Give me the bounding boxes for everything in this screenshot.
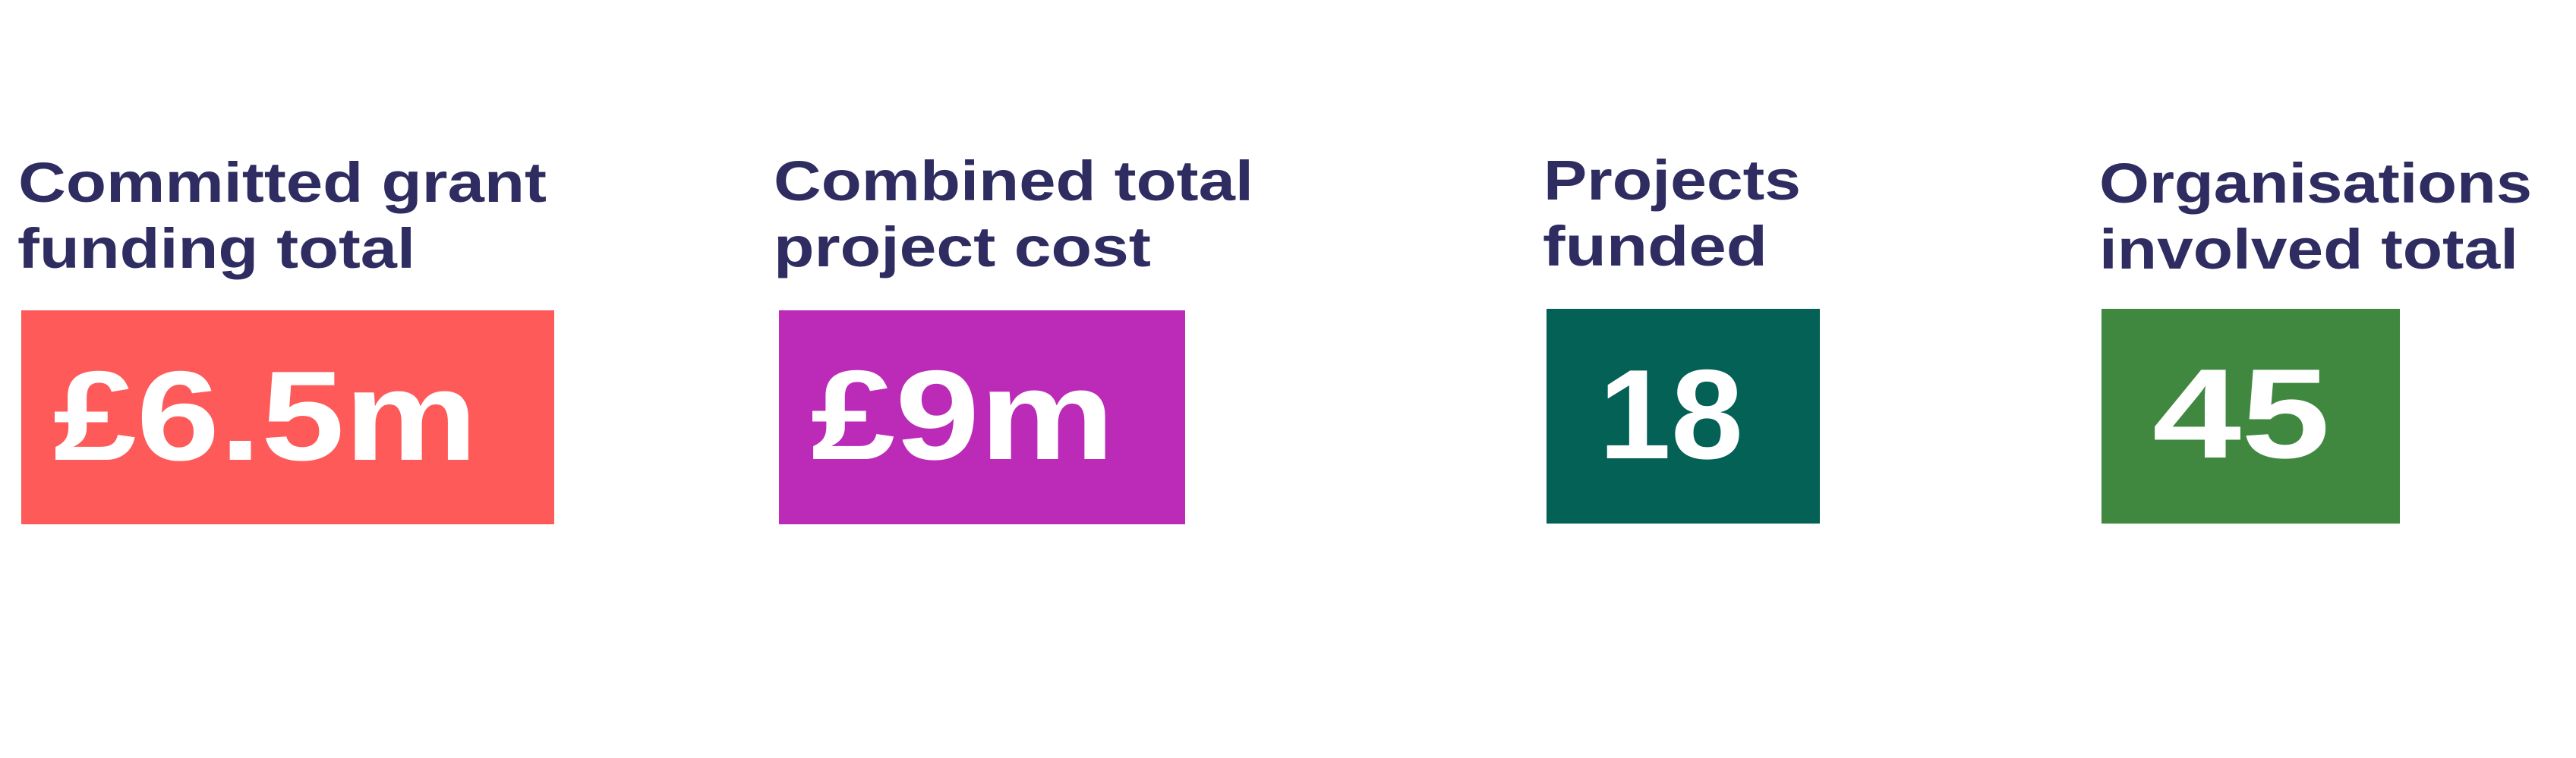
stat box: 18 <box>1547 309 1820 524</box>
heading: combined total project cost <box>774 149 1253 278</box>
heading: committed grant funding total <box>17 151 547 280</box>
stat box: 18: 18 <box>1599 343 1743 486</box>
heading: projects funded <box>1543 149 1801 278</box>
heading: combined total project cost: Combined total <box>774 149 1253 212</box>
heading: organisations involved total: Organisations <box>2099 152 2532 215</box>
stat box: £9m <box>779 310 1185 524</box>
heading: combined total project cost: project cost <box>774 215 1151 278</box>
stat box: 45 <box>2101 309 2400 524</box>
panel: projects funded <box>1543 149 1820 524</box>
stat box: £6.5m: £6.5m <box>53 344 478 487</box>
panel: committed grant funding total <box>17 151 554 524</box>
heading: organisations involved total <box>2099 152 2532 281</box>
heading: projects funded: funded <box>1543 215 1767 278</box>
heading: committed grant funding total: Committed grant <box>18 151 547 214</box>
panel: organisations involved total <box>2099 152 2532 524</box>
panel: combined total project cost <box>774 149 1253 524</box>
stat box: 45: 45 <box>2152 342 2330 485</box>
stat box: £6.5m <box>21 310 554 524</box>
heading: organisations involved total: involved total <box>2099 218 2518 281</box>
stat box: £9m: £9m <box>811 344 1115 486</box>
heading: projects funded: Projects <box>1543 149 1801 212</box>
heading: committed grant funding total: funding total <box>17 217 415 280</box>
